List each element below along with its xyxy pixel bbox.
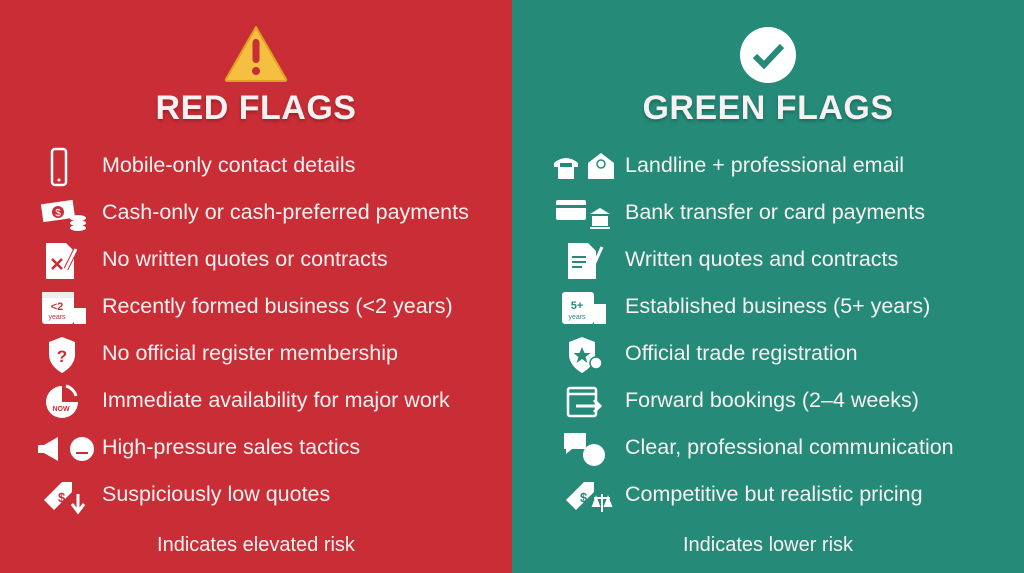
icon: check circle	[740, 27, 796, 83]
item: bank transfer	[556, 200, 925, 229]
item: recently formed: years	[48, 314, 66, 321]
item: established: Established business (5+ years)	[625, 294, 930, 318]
item: low quotes: $	[58, 490, 66, 505]
item: cash: Cash-only or cash-preferred payments	[102, 200, 469, 224]
item: trade registration	[569, 337, 858, 373]
item: immediate availability	[46, 384, 450, 418]
item: low quotes	[44, 482, 330, 514]
item: recently formed: Recently formed business (<2 years)	[102, 294, 453, 318]
item: no register: ?	[57, 347, 67, 366]
item: landline + email: Landline + professional email	[625, 152, 904, 176]
footer: elevated risk: Indicates elevated risk	[157, 534, 355, 556]
footer: lower risk: Indicates lower risk	[683, 534, 853, 556]
heading: GREEN FLAGS	[642, 89, 894, 127]
item: mobile-only: Mobile-only contact details	[102, 152, 355, 176]
item: forward bookings: Forward bookings (2–4 weeks)	[625, 388, 919, 412]
item: no written quotes	[46, 243, 388, 279]
panel: red flags	[0, 0, 512, 573]
item: mobile-only	[50, 148, 355, 186]
item: written quotes: Written quotes and contracts	[625, 246, 898, 270]
item: trade registration: Official trade registration	[625, 340, 858, 364]
item: written quotes	[568, 243, 898, 279]
item: no register: No official register membership	[102, 340, 398, 364]
item: recently formed	[42, 292, 453, 324]
item: immediate availability: Immediate availability for major work	[102, 388, 450, 412]
item: no register	[49, 337, 398, 373]
item: forward bookings	[566, 386, 919, 418]
heading: RED FLAGS	[156, 89, 356, 127]
item: established: years	[568, 314, 586, 321]
item: realistic pricing	[566, 482, 923, 512]
item: established	[562, 292, 930, 324]
item: immediate availability: NOW	[52, 406, 70, 413]
panel: green flags	[512, 0, 1024, 573]
icon: warning triangle	[224, 26, 288, 82]
item: bank transfer: Bank transfer or card payments	[625, 200, 925, 224]
item: communication: Clear, professional communication	[625, 434, 954, 458]
item: established: 5+	[571, 300, 583, 312]
item: cash: $	[55, 208, 61, 219]
item: realistic pricing: Competitive but realistic pricing	[625, 482, 923, 506]
item: realistic pricing: $	[580, 490, 588, 505]
item: high-pressure: High-pressure sales tactics	[102, 434, 360, 458]
item: cash	[40, 200, 469, 231]
item: low quotes: Suspiciously low quotes	[102, 482, 330, 506]
item: recently formed: <2	[51, 301, 63, 313]
item: no written quotes: No written quotes or contracts	[102, 246, 388, 270]
item: communication	[564, 433, 954, 466]
